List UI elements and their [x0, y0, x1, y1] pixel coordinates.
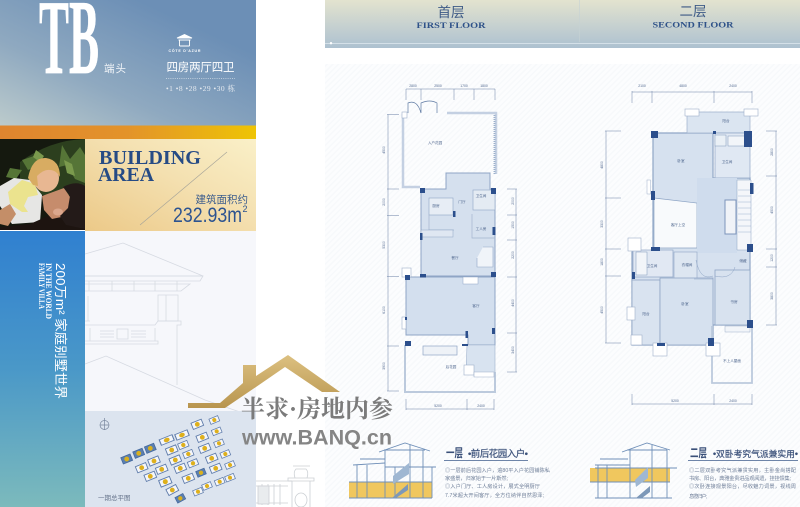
area value: 232.93m	[173, 204, 242, 227]
section drawing: first floor	[349, 443, 436, 498]
dimension lines first floor	[387, 89, 517, 410]
logo: Cote d'Azur	[168, 34, 201, 53]
floor plan: second floor: 2100	[638, 84, 646, 88]
heading: building area: BUILDING	[99, 147, 201, 169]
floor plan: first floor: 3900	[382, 362, 386, 370]
text: second floor description: •双卧考究气派兼实用•	[713, 448, 798, 459]
floor plan: first floor: 入户花园	[428, 140, 443, 145]
text: first floor description	[444, 446, 550, 499]
right page hatched background	[325, 64, 800, 507]
heading: first floor: FIRST FLOOR	[416, 20, 487, 30]
text: second floor description: ◎二层双卧考究气派兼贯实用，主卧金尚搭配	[689, 466, 797, 474]
unit type text: 四房两厅四卫	[166, 61, 234, 74]
floor plan: first floor: 4500	[382, 146, 386, 154]
heading: second floor	[652, 4, 735, 30]
room labels	[432, 193, 487, 369]
room labels: 书房	[730, 299, 738, 304]
panel: building area	[85, 139, 256, 231]
room labels: 卧室	[681, 301, 689, 306]
text: first floor description: 家盛景，归家始于一片斯然;	[445, 474, 508, 482]
watermark text: chinese: 半求·房地内参	[241, 395, 393, 423]
floor plan: first floor: 5300	[382, 241, 386, 249]
floor plan: first floor: 2800	[409, 84, 417, 88]
panel: floor headers	[325, 0, 800, 48]
floor plan: first floor: 1700	[460, 84, 468, 88]
floor plan: second floor: 1800	[600, 258, 604, 266]
adult's dark clothing	[0, 216, 85, 230]
panel: building area: AREA	[98, 164, 155, 186]
floor plan: first floor: 1500	[511, 221, 515, 229]
room labels: 阳台	[722, 118, 730, 123]
slogan: 2 million square metres: 200万m² 家庭别墅世界	[53, 263, 68, 399]
slogan: family villa: FAMILY VILLA	[37, 263, 47, 310]
floor plan: second floor: 2400	[729, 84, 737, 88]
floor plan: second floor: 3300	[600, 220, 604, 228]
heading: first floor	[416, 5, 487, 30]
room labels: 卫生间	[647, 263, 658, 268]
structural columns	[405, 188, 496, 346]
heading: second floor: 二层	[680, 4, 706, 19]
room labels: 储藏	[739, 258, 747, 263]
floor plan: first floor: 2400	[477, 404, 485, 408]
room labels: 厨房	[432, 203, 440, 208]
watermark: roof logo and site name	[188, 355, 393, 450]
floor plan: second floor: 4500	[770, 206, 774, 214]
building numbers: •1 •8 •28 •29 •30 栋	[166, 83, 236, 93]
site map buildings	[121, 416, 235, 503]
room labels: 工人房	[476, 226, 487, 231]
text: second floor description: 息揽归户;	[689, 492, 707, 500]
icon: gold roof	[188, 355, 340, 408]
room labels: 餐厅	[451, 255, 459, 260]
floor plan: first floor: 5200	[434, 404, 442, 408]
slogan: in the world: IN THE WORLD	[44, 263, 54, 319]
logo: Cote d'Azur: CÔTE D'AZUR	[168, 48, 201, 53]
floor plan: second floor: 4500	[600, 306, 604, 314]
rooms	[632, 133, 750, 345]
floor plan: second floor: 4800	[600, 161, 604, 169]
room labels: 不上人屋面	[723, 358, 741, 363]
room labels: 客厅上空	[671, 222, 686, 227]
room labels: 阳台	[642, 311, 650, 316]
heading: second floor: SECOND FLOOR	[652, 20, 735, 30]
text: second floor description	[688, 446, 798, 500]
room labels: 后花园	[446, 364, 457, 369]
icon: north compass	[100, 418, 109, 430]
floor plan: second floor	[600, 84, 777, 405]
floor plan: first floor: 6100	[382, 306, 386, 314]
room labels: 卧室	[677, 158, 685, 163]
floor plan: first floor: 2000	[382, 198, 386, 206]
dotted divider	[166, 78, 235, 80]
floor plan: second floor: 1200	[770, 254, 774, 262]
floor plan: second floor: 2800	[770, 148, 774, 156]
man's hair	[60, 183, 85, 229]
text: first floor description: ◎一层前后花园入户，逾80平入户花园铺陈私	[445, 466, 550, 474]
photo: parent and child	[0, 139, 85, 230]
orange band	[0, 126, 256, 140]
rooms	[421, 173, 495, 276]
panel: villa line drawing	[85, 231, 256, 412]
white shirt	[0, 178, 42, 224]
watermark text: url: www.BANQ.cn	[241, 426, 392, 450]
panel: building area: 2	[242, 204, 248, 214]
child's yellow top	[8, 180, 38, 212]
room labels: 衣帽间	[682, 262, 693, 267]
floor plan: first floor: 1800	[480, 84, 488, 88]
floor plan: first floor: 4400	[511, 299, 515, 307]
floor plan: first floor	[382, 84, 517, 410]
structural columns	[632, 131, 754, 346]
area caption: 建筑面积约	[196, 193, 248, 206]
floor plan: second floor: 2400	[729, 399, 737, 403]
text: first floor description: •前后花园入户•	[468, 448, 528, 460]
room labels	[642, 118, 747, 363]
floor plan: second floor: 3800	[770, 292, 774, 300]
room labels: 客厅	[472, 303, 480, 308]
panel: blue slogan column	[0, 231, 85, 507]
floor plan: first floor: 3400	[511, 346, 515, 354]
room labels: 卫生间	[722, 159, 733, 164]
room labels: 门厅	[458, 199, 466, 204]
outline details	[712, 325, 752, 383]
text: second floor description: 书房、阳台，典雅金贵进品观阅遗，挂挂馈集;	[689, 474, 791, 482]
panel: site plan	[85, 411, 256, 507]
label: end unit: 端头	[104, 62, 127, 75]
entry garden	[403, 113, 496, 187]
gate drawing	[256, 466, 314, 507]
text: second floor description: ◎次卧连接观景阳台，尽收魅力词景，视线周	[689, 482, 796, 490]
text: first floor description: 一层	[446, 446, 463, 460]
text: first floor description: 7.7米超大开间客厅，全方位纳伴自然恩泽;	[445, 491, 544, 499]
floor plan: first floor: 2500	[434, 84, 442, 88]
site plan caption: 一期总平图	[98, 493, 130, 502]
section drawing: second floor	[590, 443, 677, 498]
diagonal divider	[140, 152, 227, 225]
text: second floor description: 二层	[690, 446, 707, 460]
heading: first floor: 首层	[438, 5, 464, 20]
floor plan: first floor: 2000	[511, 197, 515, 205]
floor plan: second floor: 4800	[679, 84, 687, 88]
room labels: 卫生间	[476, 193, 487, 198]
child's arm	[0, 204, 16, 226]
text: first floor description: ◎入户门厅、工人房设计，展式全明厨厅	[445, 482, 540, 490]
panel: type header	[0, 0, 256, 126]
dimension lines second floor	[605, 91, 777, 405]
man's face	[42, 188, 72, 219]
floor plan: first floor: 2200	[511, 251, 515, 259]
floor plan: second floor: 5200	[671, 399, 679, 403]
child's face and hair	[33, 164, 59, 192]
